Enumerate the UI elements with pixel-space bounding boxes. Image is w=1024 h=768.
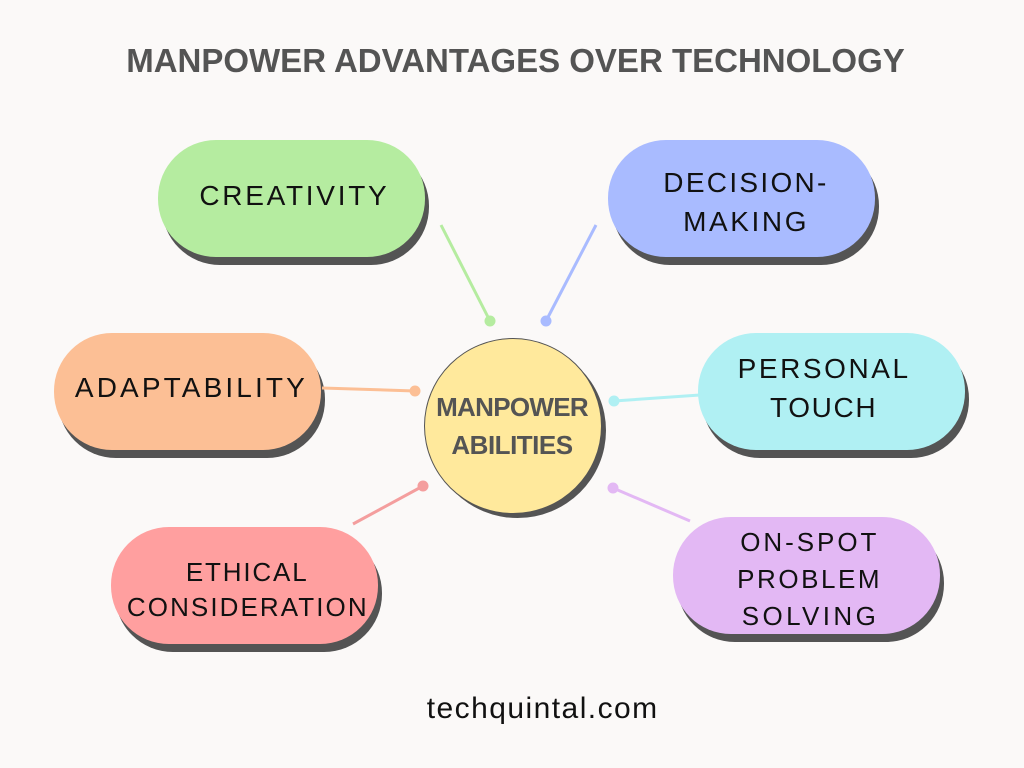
center label [436,392,588,460]
label: on-spot problem solving: PROBLEM [737,564,882,594]
connector: ethical consideration [353,480,428,524]
label: creativity: CREATIVITY [199,180,389,211]
label: personal touch [738,353,911,423]
label: ethical consideration: ETHICAL [186,557,309,587]
pill: adaptability [54,333,325,458]
label: personal touch: TOUCH [770,392,877,423]
label: on-spot problem solving [737,526,882,631]
connector: personal touch [608,395,700,406]
connector: creativity [441,225,496,326]
label: on-spot problem solving: SOLVING [742,601,879,631]
label: decision-making: MAKING [683,206,809,237]
footer: website: techquintal.com [427,692,659,725]
pill: personal touch [698,333,969,458]
pill: decision-making [608,140,879,265]
pill: ethical consideration [111,527,382,652]
label: ethical consideration [127,557,369,622]
center circle: manpower abilities [424,338,606,518]
center label: MANPOWER [436,392,588,422]
connector: decision-making [540,225,596,326]
label: on-spot problem solving: ON-SPOT [740,526,879,556]
connector: adaptability [322,386,420,396]
label: adaptability: ADAPTABILITY [75,372,308,403]
connector: on-spot problem solving [608,482,690,521]
pill: on-spot problem solving [673,517,944,642]
center label: ABILITIES [451,430,573,460]
label: personal touch: PERSONAL [738,353,911,384]
label: ethical consideration: CONSIDERATION [127,592,369,622]
label: decision-making: DECISION- [663,167,829,198]
pill: creativity [158,140,429,265]
title: MANPOWER ADVANTAGES OVER TECHNOLOGY [126,42,905,79]
label: decision-making [663,167,829,237]
